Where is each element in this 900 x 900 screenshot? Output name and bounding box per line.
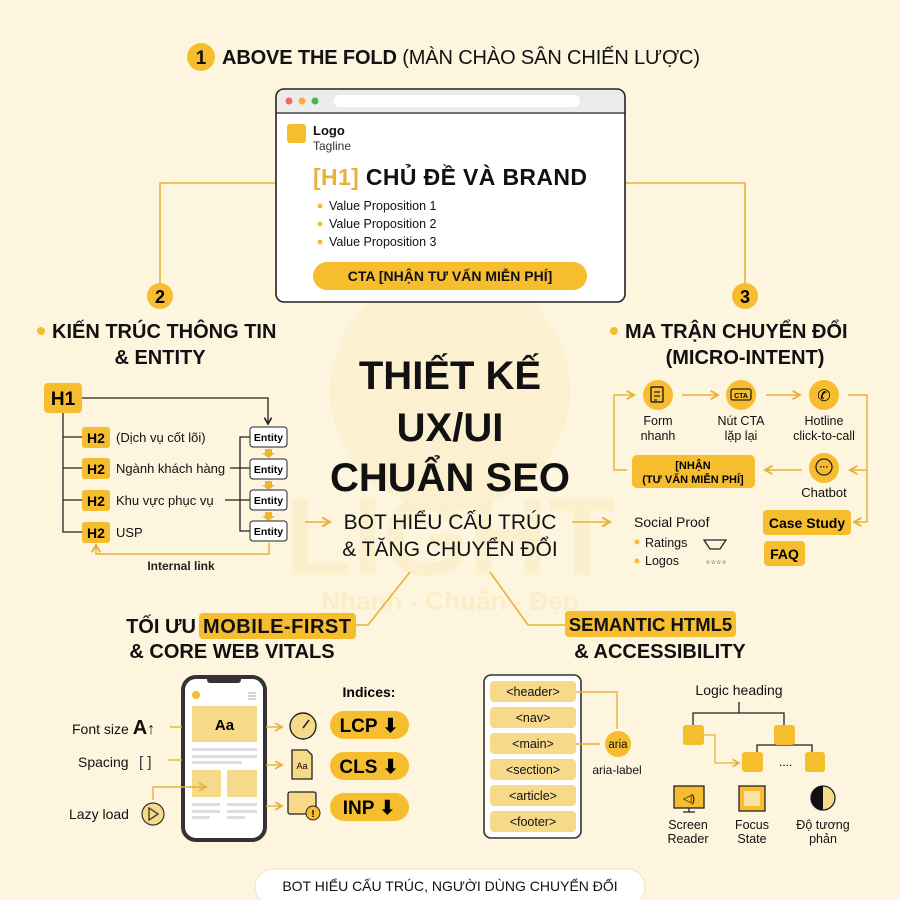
heading: mobile first: TỐI ƯU — [126, 614, 196, 638]
panel: conversion matrix: Nút CTA — [718, 414, 765, 428]
panel: semantic: Độ tương — [796, 818, 850, 832]
social proof: Social Proof — [634, 514, 710, 530]
value propositions: Value Proposition 1 — [329, 199, 437, 213]
heading: mobile first — [126, 613, 356, 663]
badge 3 — [732, 283, 758, 309]
cta button — [313, 262, 587, 290]
icon: contrast — [811, 786, 835, 810]
watermark — [285, 270, 615, 616]
panel: conversion matrix: Case Study — [769, 515, 845, 531]
icon: screen reader — [674, 786, 704, 812]
panel: heading hierarchy: H2 — [87, 493, 105, 509]
panel: conversion matrix: Ratings — [645, 536, 687, 550]
nhan box — [632, 455, 755, 488]
panel: conversion matrix: Logos — [645, 554, 679, 568]
panel: mobile: INP ⬇ — [343, 798, 395, 819]
panel: heading hierarchy: Entity — [254, 526, 283, 538]
labels: Font size A↑ — [72, 717, 155, 739]
footer banner: BOT HIỂU CẤU TRÚC, NGƯỜI DÙNG CHUYỂN ĐỔI — [282, 877, 618, 894]
h1: [H1] CHỦ ĐỀ VÀ BRAND — [313, 162, 587, 190]
heading: ma tran: MA TRẬN CHUYỂN ĐỔI — [625, 319, 848, 343]
panel: semantic — [484, 675, 850, 846]
panel: heading hierarchy: Entity — [254, 464, 283, 476]
panel: semantic: State — [737, 832, 767, 846]
icon: form — [643, 380, 673, 410]
panel: mobile: LCP ⬇ — [340, 716, 398, 737]
panel: mobile: Spacing — [78, 754, 129, 770]
panel: heading hierarchy — [44, 383, 287, 573]
heading: mobile first: MOBILE-FIRST — [203, 616, 351, 638]
panel: semantic: <nav> — [516, 711, 550, 725]
heading: mobile first: & CORE WEB VITALS — [129, 641, 335, 663]
heading: ma tran — [610, 319, 848, 369]
faq — [764, 541, 805, 566]
panel: conversion matrix: Hotline — [805, 414, 843, 428]
icon: warning window: ! — [311, 809, 315, 820]
panel: heading hierarchy: H2 — [87, 430, 105, 446]
panel: mobile: Aa — [215, 717, 235, 734]
panel: semantic: <section> — [506, 763, 560, 777]
panel: conversion matrix: FAQ — [770, 546, 799, 562]
panel: semantic: Focus — [735, 818, 769, 832]
heading: semantic — [565, 611, 746, 663]
panel: semantic: <footer> — [510, 815, 556, 829]
panel: heading hierarchy: H1 — [51, 389, 76, 410]
panel: semantic: <article> — [509, 789, 557, 803]
heading: semantic: SEMANTIC HTML5 — [569, 614, 732, 635]
icon: cta: CTA — [734, 393, 748, 400]
center title: THIẾT KẾ — [359, 352, 541, 398]
panel: heading hierarchy: Entity — [254, 432, 283, 444]
panel: conversion matrix: lặp lại — [725, 429, 757, 443]
center title: BOT HIỂU CẤU TRÚC — [344, 511, 556, 534]
center title: UX/UI — [397, 406, 503, 450]
icon: doc — [292, 750, 312, 779]
panel: heading hierarchy: Khu vực phục vụ — [116, 493, 214, 508]
panel: semantic: Screen — [668, 818, 708, 832]
case study — [763, 510, 851, 535]
icon: chatbot: ··· — [820, 462, 828, 472]
heading: ma tran: (MICRO-INTENT) — [666, 347, 824, 369]
badge 2 — [147, 283, 173, 309]
panel: browser mockup — [276, 89, 625, 302]
icon: focus state — [739, 786, 765, 811]
badge 2: 2 — [155, 287, 165, 307]
panel: semantic: aria-label — [592, 763, 642, 777]
value propositions: Value Proposition 2 — [329, 217, 437, 231]
panel: mobile: CLS ⬇ — [339, 757, 399, 778]
center title: & TĂNG CHUYỂN ĐỔI — [342, 537, 558, 561]
icon: warning window — [288, 792, 320, 820]
icon: phone: ✆ — [817, 388, 831, 405]
panel: conversion matrix: ☆☆☆☆ — [705, 559, 727, 566]
panel: semantic: Logic heading — [695, 682, 783, 698]
panel: heading hierarchy: USP — [116, 525, 143, 540]
panel: browser mockup: CTA [NHẬN TƯ VẤN MIỄN PHÍ] — [348, 267, 552, 284]
title: above the fold: ABOVE THE FOLD (MÀN CHÀO SÂN CHIẾN LƯỢC) — [222, 46, 700, 69]
footer banner — [255, 869, 645, 900]
panel: conversion matrix: Form — [643, 414, 673, 428]
icon: cta — [726, 380, 756, 410]
badge 3: 3 — [740, 287, 750, 307]
panel: semantic: <main> — [512, 737, 554, 751]
panel: mobile: Indices: — [343, 684, 395, 700]
icon: phone — [809, 380, 839, 410]
panel: semantic: .... — [779, 755, 792, 769]
panel: heading hierarchy: H2 — [87, 525, 105, 541]
watermark: LIGHT — [285, 476, 615, 599]
connectors top — [160, 183, 745, 625]
panel: mobile: Lazy load — [69, 806, 129, 822]
panel: mobile: [ ] — [139, 754, 152, 771]
icon: screen reader: ◁) — [683, 793, 695, 805]
panel: heading hierarchy: Ngành khách hàng — [116, 461, 225, 476]
panel: heading hierarchy: Entity — [254, 495, 283, 507]
panel: conversion matrix: (TƯ VẤN MIỄN PHÍ] — [642, 473, 744, 486]
panel: mobile — [69, 677, 409, 840]
panel: semantic: <header> — [506, 685, 560, 699]
panel: conversion matrix: nhanh — [641, 429, 675, 443]
value propositions — [318, 199, 437, 249]
panel: conversion matrix: click-to-call — [793, 429, 855, 443]
panel: conversion matrix: [NHẬN — [675, 459, 711, 472]
icon: chatbot — [809, 453, 839, 483]
panel: heading hierarchy: H2 — [87, 461, 105, 477]
heading: kien truc: & ENTITY — [114, 347, 206, 369]
panel: conversion matrix — [614, 380, 867, 568]
panel: semantic: aria — [608, 739, 628, 751]
watermark: Nhanh - Chuẩn - Đẹp — [321, 586, 579, 616]
icon: doc: Aa — [296, 761, 308, 771]
heading: kien truc — [37, 319, 276, 369]
title: above the fold: 1 — [196, 48, 207, 69]
panel: browser mockup: Tagline — [313, 139, 351, 153]
panel: browser mockup: Logo — [313, 123, 345, 138]
panel: conversion matrix: Chatbot — [801, 485, 847, 500]
value propositions: Value Proposition 3 — [329, 235, 437, 249]
center title: CHUẨN SEO — [330, 453, 570, 500]
panel: heading hierarchy: Internal link — [147, 559, 215, 573]
panel: semantic: Reader — [668, 832, 708, 846]
logo — [287, 124, 306, 143]
panel: semantic: phản — [809, 832, 837, 846]
center title — [330, 352, 570, 561]
phone — [183, 677, 265, 840]
icon: gauge — [290, 713, 316, 739]
heading: kien truc: KIẾN TRÚC THÔNG TIN — [52, 319, 276, 343]
panel: heading hierarchy: (Dịch vụ cốt lõi) — [116, 430, 206, 445]
heading: semantic: & ACCESSIBILITY — [574, 641, 746, 663]
